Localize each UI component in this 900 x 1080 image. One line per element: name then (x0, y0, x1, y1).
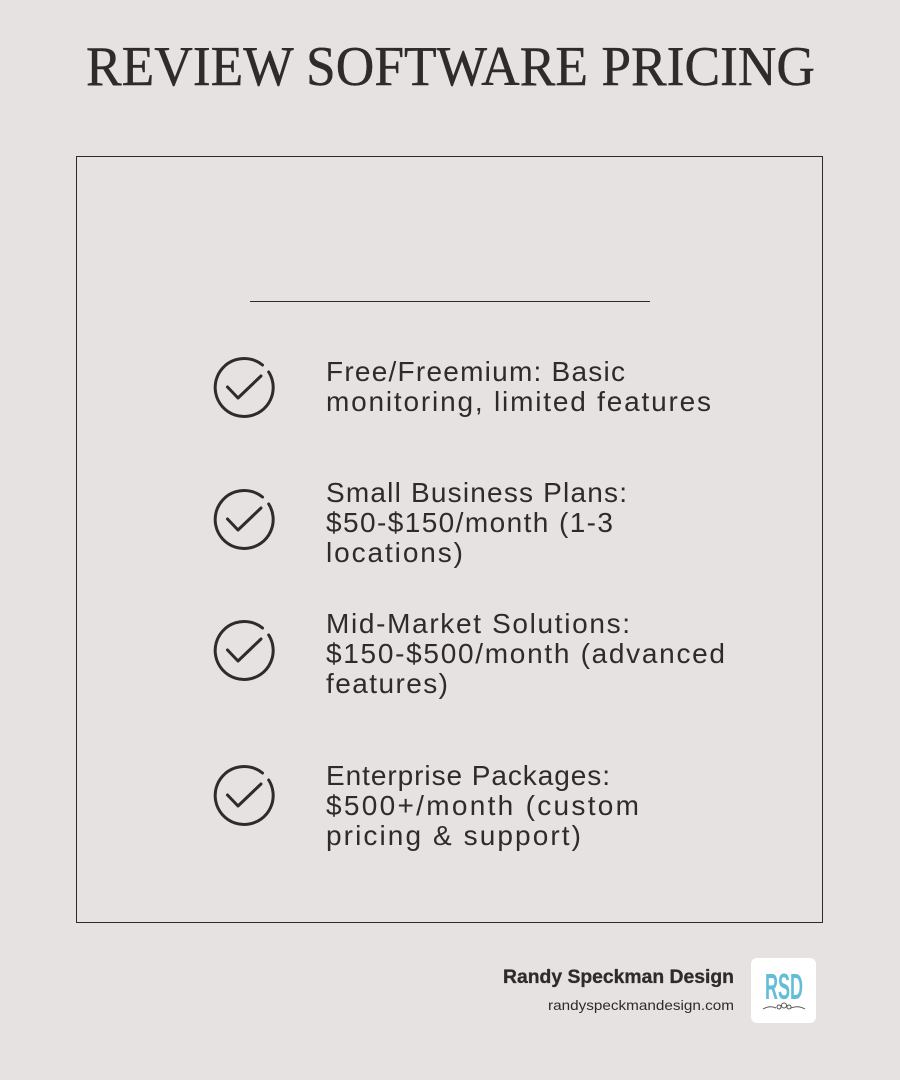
icon: check circle (215, 490, 273, 548)
tier: free/freemium (215, 356, 711, 417)
title: REVIEW SOFTWARE PRICING (86, 36, 815, 98)
tier: enterprise (215, 760, 639, 851)
logo: RSD (751, 958, 816, 1023)
text: enterprise: pricing & support) (326, 820, 581, 851)
text: free/freemium (326, 356, 711, 417)
text: small business: Small Business Plans: (326, 477, 627, 508)
text: mid-market: Mid-Market Solutions: (326, 608, 630, 639)
text: free/freemium: monitoring, limited features (326, 386, 711, 417)
icon: check circle (215, 621, 273, 679)
logo: RSD: RSD (765, 966, 803, 1007)
text: mid-market: $150-$500/month (advanced (326, 638, 725, 669)
icon: check circle (215, 358, 273, 416)
text: free/freemium: Free/Freemium: Basic (326, 356, 625, 387)
footer: website: randyspeckmandesign.com (548, 997, 734, 1013)
icon: check circle (215, 766, 273, 824)
text: enterprise: $500+/month (custom (326, 790, 639, 821)
tier: small business (215, 477, 627, 568)
text: small business: locations) (326, 537, 463, 568)
text: mid-market (326, 608, 725, 699)
panel: pricing tiers (76, 156, 822, 922)
text: small business (326, 477, 627, 568)
text: enterprise: Enterprise Packages: (326, 760, 610, 791)
text: small business: $50-$150/month (1-3 (326, 507, 613, 538)
text: enterprise (326, 760, 639, 851)
text: mid-market: features) (326, 668, 448, 699)
tier: mid-market (215, 608, 725, 699)
footer: brand name: Randy Speckman Design (503, 967, 734, 988)
